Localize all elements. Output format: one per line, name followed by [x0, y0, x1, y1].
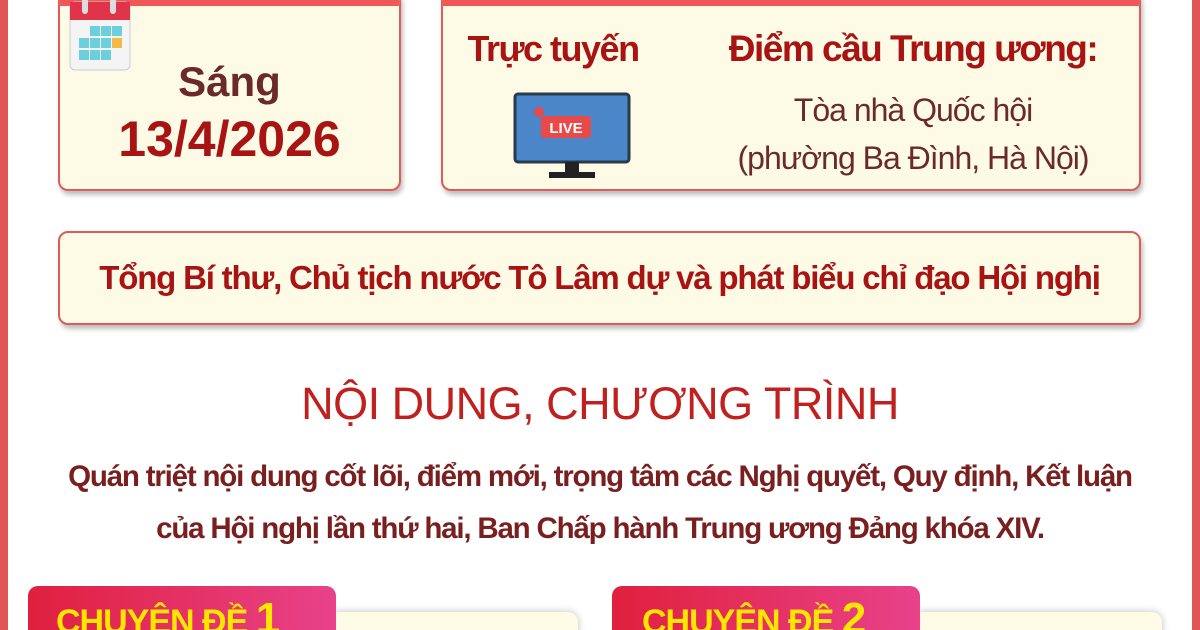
- heading: NỘI DUNG, CHƯƠNG TRÌNH: [301, 378, 899, 429]
- text: online: Trực tuyến: [467, 28, 639, 69]
- panel: date: [58, 0, 401, 191]
- panel: location: (phường Ba Đình, Hà Nội): [737, 140, 1088, 176]
- panel: location: Tòa nhà Quốc hội: [794, 92, 1032, 128]
- text: central point: Điểm cầu Trung ương:: [729, 28, 1097, 69]
- text block: content: của Hội nghị lần thứ hai, Ban Chấp hành Trung ương Đảng khóa XIV.: [156, 512, 1044, 545]
- icon: live tv: [514, 92, 630, 178]
- panel: location: [441, 0, 1141, 191]
- text block: content: [68, 460, 1132, 545]
- panel: topic 1: [28, 586, 582, 630]
- text block: content: Quán triệt nội dung cốt lõi, điểm mới, trọng tâm các Nghị quyết, Quy định, Kết luận: [68, 460, 1132, 493]
- icon: live tv: LIVE: [549, 120, 583, 137]
- banner: [58, 231, 1141, 325]
- banner: Tổng Bí thư, Chủ tịch nước Tô Lâm dự và phát biểu chỉ đạo Hội nghị: [99, 259, 1100, 296]
- icon: calendar: [70, 0, 130, 70]
- panel: date: 13/4/2026: [118, 111, 341, 167]
- panel: topic 2: [612, 586, 1166, 630]
- text: date: Sáng: [178, 58, 281, 105]
